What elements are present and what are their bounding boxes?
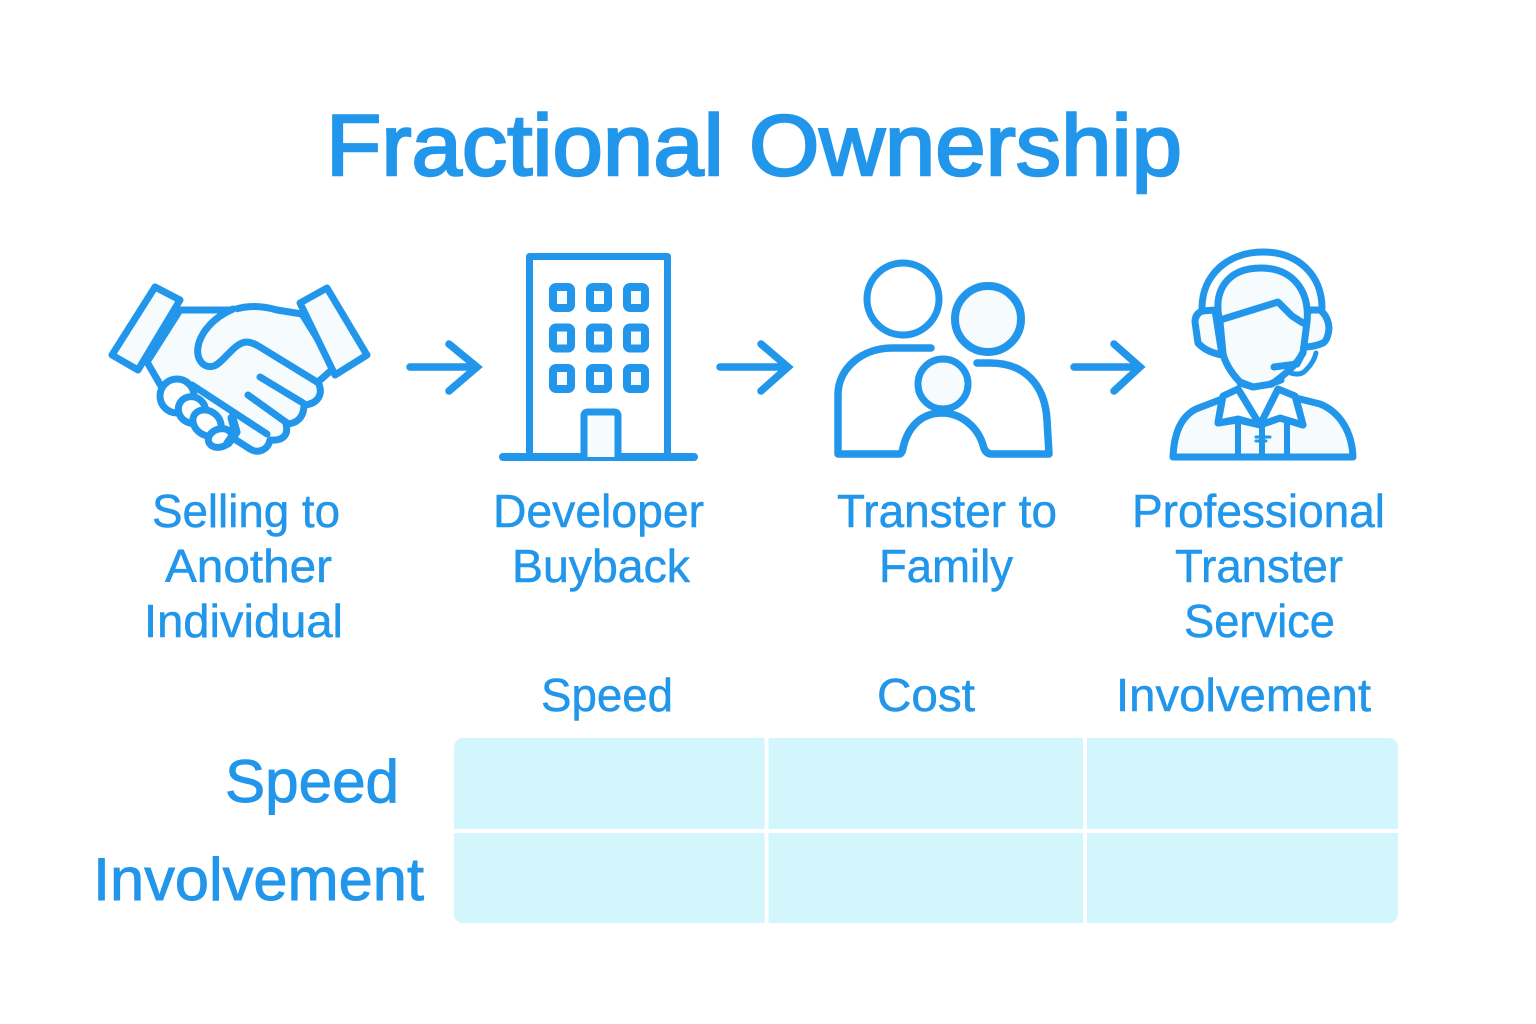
label: selling to another individual: Selling to <box>152 485 340 537</box>
title: Fractional Ownership <box>326 98 1182 194</box>
icon: office building <box>503 256 694 457</box>
label: transter to family: Transter to <box>837 485 1057 537</box>
label: transter to family: Family <box>879 540 1013 592</box>
row heading: involvement: Involvement <box>93 846 424 913</box>
label: professional transter service: Transter <box>1175 540 1343 592</box>
column heading: cost: Cost <box>877 669 975 721</box>
arrow 1 <box>410 344 477 391</box>
arrow 3 <box>1074 344 1140 391</box>
comparison table <box>454 738 1398 923</box>
label: transter to family <box>837 485 1057 592</box>
label: professional transter service: Service <box>1184 595 1335 647</box>
label: developer buyback: Developer <box>493 485 704 537</box>
icon: family <box>838 263 1049 454</box>
label: selling to another individual: Individual <box>144 595 343 647</box>
arrow 2 <box>720 344 788 391</box>
label: developer buyback: Buyback <box>512 540 691 592</box>
label: professional transter service: Professional <box>1132 485 1385 537</box>
label: developer buyback <box>493 485 704 592</box>
icon: support agent with headset <box>1173 252 1353 457</box>
column heading: involvement: Involvement <box>1116 669 1371 721</box>
label: selling to another individual: Another <box>165 540 332 592</box>
label: selling to another individual <box>144 485 343 647</box>
column heading: speed: Speed <box>541 669 673 721</box>
icon: handshake <box>112 287 367 451</box>
row heading: speed: Speed <box>225 748 399 815</box>
label: professional transter service <box>1132 485 1385 647</box>
